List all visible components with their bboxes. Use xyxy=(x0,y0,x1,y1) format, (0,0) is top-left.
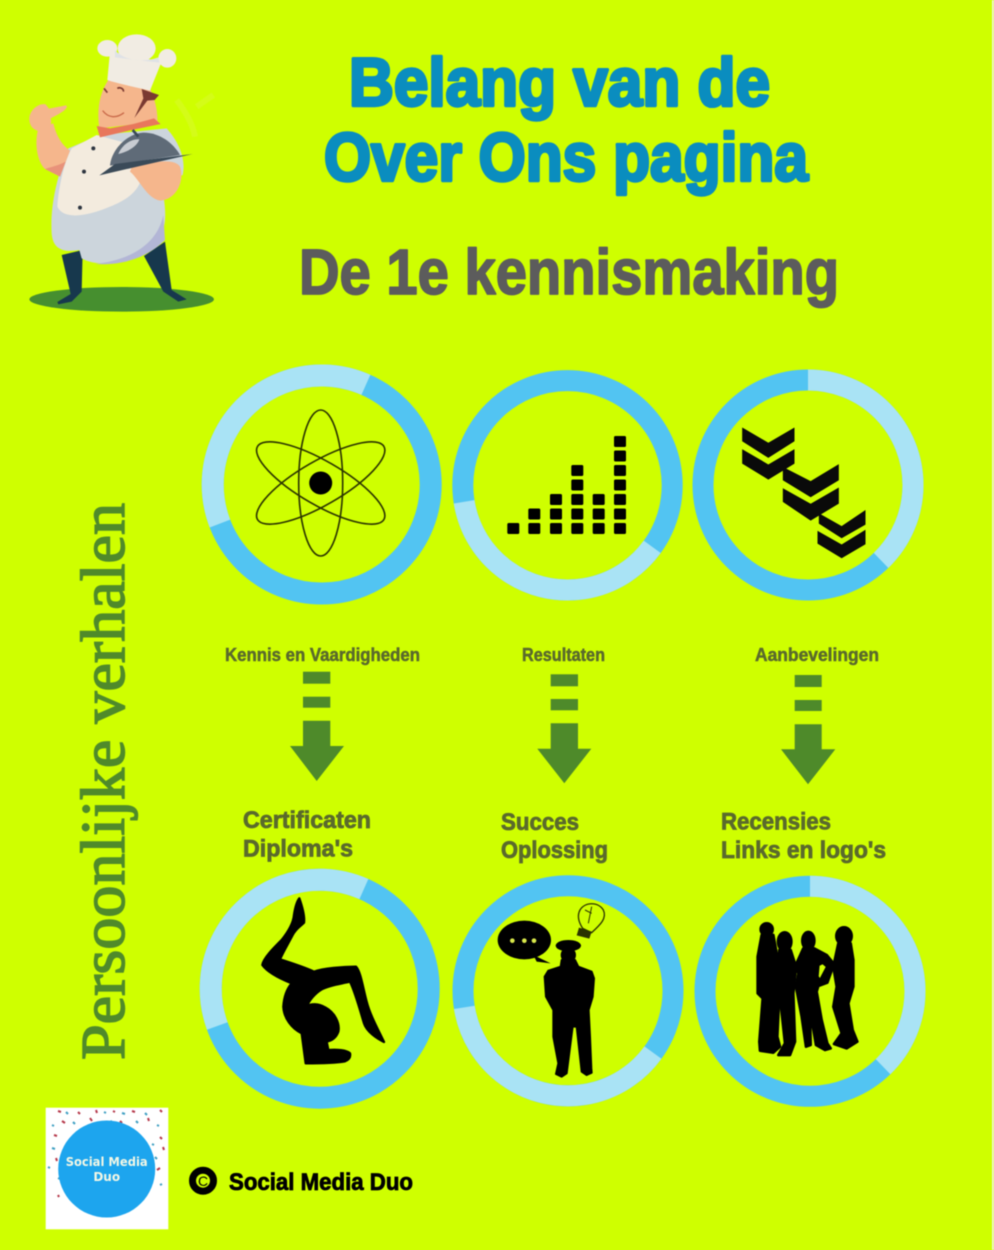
column 1 label: Kennis en Vaardigheden xyxy=(225,645,420,665)
logo: social media duo: Duo xyxy=(93,1170,120,1184)
text: succes oplossing: Succes xyxy=(501,809,579,836)
panel: kennis en vaardigheden ring with atom icon xyxy=(181,344,463,625)
icon: gymnast silhouette xyxy=(262,898,384,1063)
panel: resultaten ring with bar icon xyxy=(421,339,714,632)
icon: descending chevrons xyxy=(743,428,865,558)
text: certificaten diploma's: Certificaten xyxy=(243,807,371,834)
text: succes oplossing: Oplossing xyxy=(501,837,608,864)
vertical heading: Persoonlijke verhalen xyxy=(70,503,138,1060)
icon: person with speech bubble and light bulb xyxy=(498,904,604,1077)
panel: recensies ring with group icon xyxy=(705,886,915,1096)
icon: stacked bar chart xyxy=(507,436,626,534)
text: certificaten diploma's xyxy=(243,807,371,862)
panel: aanbevelingen ring with chevron icon xyxy=(703,380,913,590)
illustration: chef with cloche xyxy=(29,34,214,312)
text: recensies links en logo's xyxy=(721,808,886,864)
text: recensies links en logo's: Recensies xyxy=(721,808,831,836)
column 3 label: Aanbevelingen xyxy=(755,645,879,665)
arrow: column 1 xyxy=(290,672,344,781)
text: succes oplossing xyxy=(501,809,608,864)
arrow: column 3 xyxy=(781,675,835,784)
text: recensies links en logo's: Links en logo's xyxy=(721,837,886,864)
panel: certificaten ring with gymnast icon xyxy=(180,849,459,1128)
icon: atom xyxy=(246,410,395,556)
title: Belang van de xyxy=(349,44,770,120)
copyright credit: C xyxy=(198,1173,208,1189)
text: certificaten diploma's: Diploma's xyxy=(243,836,353,862)
column 2 label: Resultaten xyxy=(522,645,605,665)
copyright credit: Social Media Duo xyxy=(229,1169,413,1196)
confetti decoration xyxy=(48,1110,164,1197)
icon: group of four people xyxy=(758,923,857,1055)
logo: social media duo xyxy=(46,1108,168,1229)
arrow: column 2 xyxy=(537,674,591,783)
logo: social media duo: Social Media xyxy=(66,1155,148,1169)
subtitle: De 1e kennismaking xyxy=(299,236,839,308)
title xyxy=(324,44,809,196)
panel: succes ring with speaking person icon xyxy=(421,844,715,1137)
title: Over Ons pagina xyxy=(324,120,809,196)
